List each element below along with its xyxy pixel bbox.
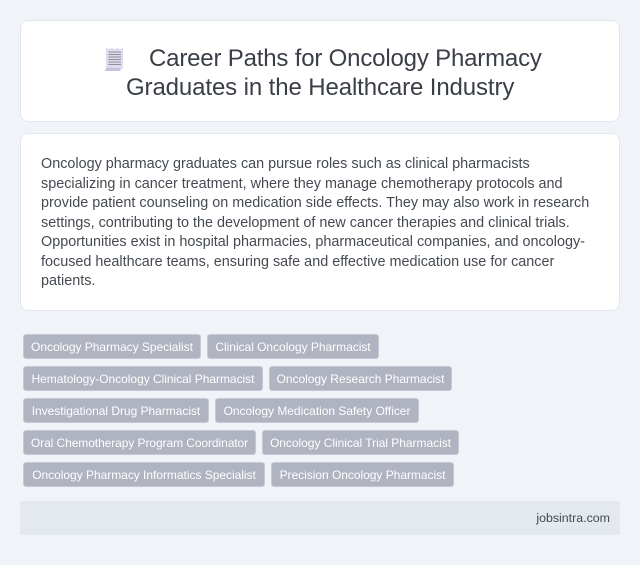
footer text: jobsintra.com xyxy=(536,511,610,525)
tag: Clinical Oncology Pharmacist xyxy=(215,340,371,354)
tag xyxy=(23,398,209,423)
tag: Precision Oncology Pharmacist xyxy=(280,468,445,482)
text block: description: Opportunities exist in hospital pharmacies, pharmaceutical companies, and oncology- xyxy=(41,234,585,250)
tag: Oncology Pharmacy Specialist xyxy=(31,340,193,354)
text block: description: settings, contributing to the development of new cancer therapies and clinical trials. xyxy=(41,214,570,230)
tag xyxy=(23,430,256,455)
tag xyxy=(271,462,454,487)
tag xyxy=(215,398,419,423)
tag xyxy=(207,334,379,359)
tag xyxy=(23,366,263,391)
tag: Oncology Medication Safety Officer xyxy=(224,404,410,418)
tag xyxy=(23,334,201,359)
title line 2: Graduates in the Healthcare Industry xyxy=(126,74,514,101)
text block: description: provide patient counseling on medication side effects. They may also work in research xyxy=(41,195,589,211)
text block: description xyxy=(41,156,589,289)
tag: Hematology-Oncology Clinical Pharmacist xyxy=(32,372,254,386)
panel: title header xyxy=(20,20,620,122)
text block: description: focused healthcare teams, ensuring safe and effective medication use for cancer xyxy=(41,254,554,270)
tag: Oncology Research Pharmacist xyxy=(277,372,444,386)
tag xyxy=(23,462,265,487)
text block: description: patients. xyxy=(41,273,95,289)
tags: career paths xyxy=(23,334,459,487)
title: Career Paths for Oncology Pharmacy xyxy=(149,45,542,72)
tag: Oncology Clinical Trial Pharmacist xyxy=(270,436,451,450)
tag: Oncology Pharmacy Informatics Specialist xyxy=(32,468,256,482)
icon: document scroll xyxy=(104,48,123,71)
tag xyxy=(262,430,459,455)
footer bar xyxy=(20,501,620,535)
tag: Investigational Drug Pharmacist xyxy=(32,404,200,418)
text block: description: specializing in cancer treatment, where they manage chemotherapy protocols and xyxy=(41,176,563,192)
tag xyxy=(269,366,452,391)
text block: description: Oncology pharmacy graduates can pursue roles such as clinical pharmacists xyxy=(41,156,530,172)
tag: Oral Chemotherapy Program Coordinator xyxy=(31,436,248,450)
panel: description xyxy=(20,133,620,311)
